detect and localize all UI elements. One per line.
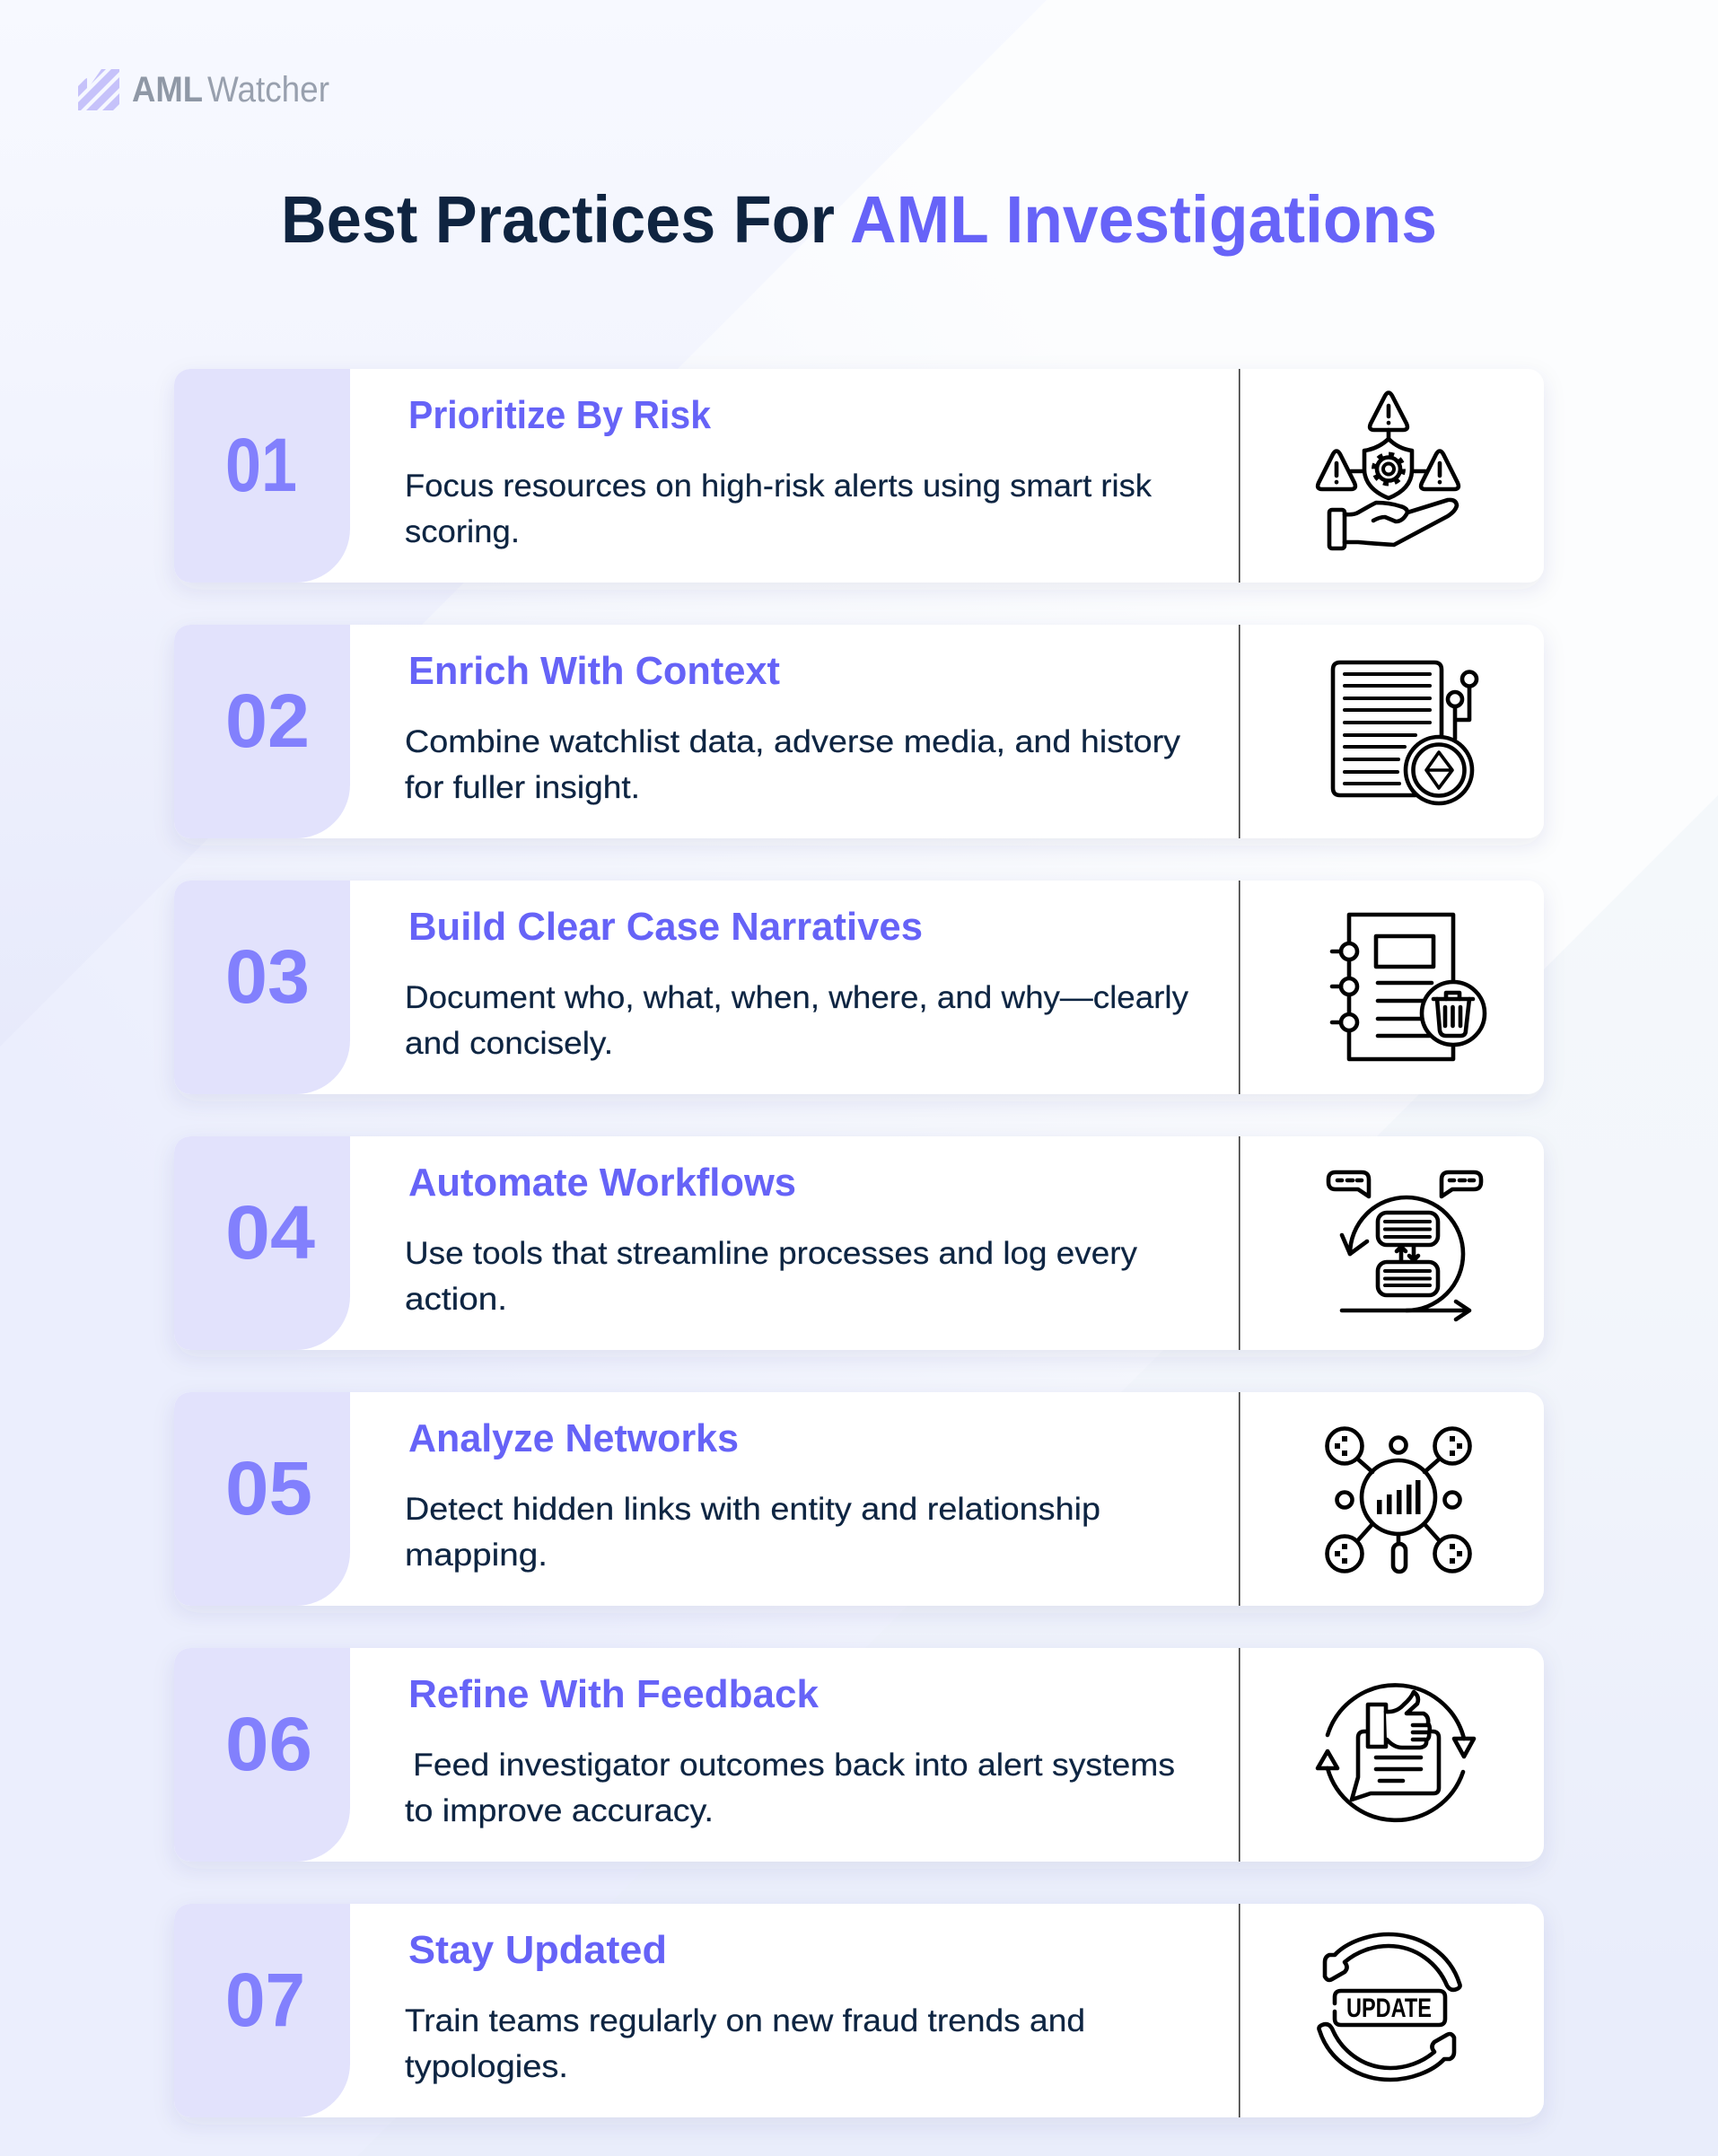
description — [405, 2003, 1085, 2084]
number badge 01 — [174, 369, 350, 583]
logo: Watcher — [207, 70, 329, 110]
description: action. — [405, 1282, 507, 1317]
description — [405, 1492, 1100, 1573]
number badge 05 — [174, 1392, 350, 1606]
description: to improve accuracy. — [405, 1793, 714, 1828]
description: typologies. — [405, 2049, 568, 2084]
description: Focus resources on high-risk alerts using smart risk — [405, 469, 1153, 504]
heading: Stay Updated — [408, 1928, 667, 1972]
panel: practice 05 — [174, 1392, 1544, 1606]
number badge 01: 01 — [225, 423, 297, 507]
heading: Prioritize By Risk — [408, 393, 711, 437]
description: Detect hidden links with entity and relationship — [405, 1492, 1100, 1527]
panel: practice 01 — [174, 369, 1544, 583]
icon: document with coin — [1333, 662, 1477, 803]
panel: practice 06 — [174, 1648, 1544, 1862]
description: Use tools that streamline processes and log every — [405, 1236, 1138, 1271]
number badge 07: 07 — [225, 1958, 305, 2042]
description: mapping. — [405, 1538, 548, 1573]
logo: AML — [132, 70, 203, 110]
title: AML Investigations — [850, 182, 1437, 257]
number badge 02: 02 — [225, 679, 310, 763]
description: Combine watchlist data, adverse media, and history — [405, 724, 1181, 759]
number badge 07 — [174, 1904, 350, 2117]
description — [405, 469, 1153, 549]
icon: feedback thumbs up — [1318, 1685, 1474, 1820]
number badge 04 — [174, 1136, 350, 1350]
number badge 06 — [174, 1648, 350, 1862]
title: Best Practices For — [281, 182, 835, 257]
description: Train teams regularly on new fraud trends and — [405, 2003, 1085, 2038]
description — [405, 724, 1181, 805]
description: scoring. — [405, 514, 520, 549]
panel: practice 04 — [174, 1136, 1544, 1350]
icon: risk shield on hand — [1318, 393, 1459, 548]
description — [405, 1236, 1138, 1317]
number badge 06: 06 — [225, 1702, 312, 1786]
heading: Build Clear Case Narratives — [408, 905, 923, 949]
logo — [78, 69, 329, 110]
description — [405, 1748, 1175, 1828]
description: Feed investigator outcomes back into alert systems — [413, 1748, 1175, 1783]
icon: network analysis — [1327, 1429, 1470, 1572]
description: for fuller insight. — [405, 770, 640, 805]
heading: Refine With Feedback — [408, 1672, 820, 1716]
number badge 03: 03 — [225, 934, 310, 1019]
heading: Analyze Networks — [408, 1416, 739, 1460]
icon: update arrows — [1319, 1934, 1460, 2080]
description: and concisely. — [405, 1026, 613, 1061]
icon: logo mark — [78, 69, 119, 110]
number badge 05: 05 — [225, 1446, 312, 1530]
description — [405, 980, 1189, 1061]
heading: Automate Workflows — [408, 1161, 796, 1205]
number badge 03 — [174, 881, 350, 1094]
icon: update arrows: UPDATE — [1346, 1994, 1432, 2023]
number badge 04: 04 — [225, 1190, 315, 1275]
panel: practice 03 — [174, 881, 1544, 1094]
icon: workflow cycle — [1328, 1172, 1481, 1319]
heading: Enrich With Context — [408, 649, 780, 693]
panel: practice 07 — [174, 1904, 1544, 2117]
panel: practice 02 — [174, 625, 1544, 838]
icon: notebook with trash — [1332, 915, 1485, 1059]
title — [281, 182, 1437, 257]
number badge 02 — [174, 625, 350, 838]
description: Document who, what, when, where, and why—clearly — [405, 980, 1189, 1015]
